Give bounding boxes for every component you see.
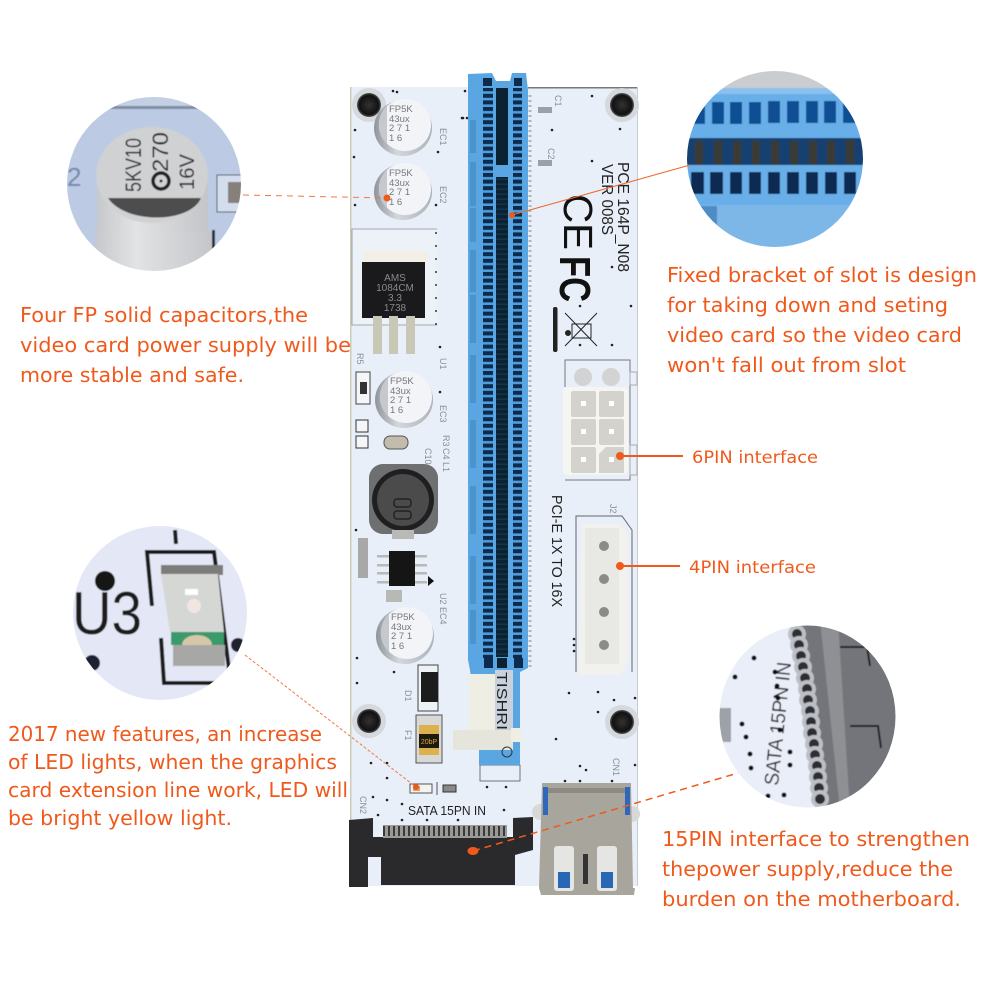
text block: capacitors: video card power supply will be bbox=[20, 333, 351, 357]
silkscreen small labels: C4 L1 bbox=[441, 448, 451, 472]
label: 6PIN: 6PIN interface bbox=[692, 448, 818, 468]
slot latch clip and TISHRI label: TISHRI bbox=[493, 672, 510, 730]
silkscreen small labels: R5 bbox=[355, 353, 365, 365]
text block: 15PIN: 15PIN interface to strengthen bbox=[662, 827, 970, 851]
callout circle: capacitor close-up: 5KV10 bbox=[121, 138, 146, 192]
silkscreen small labels: D1 bbox=[403, 690, 413, 702]
leader line: 6pin bbox=[616, 452, 683, 460]
silkscreen small labels: EC3 bbox=[438, 405, 448, 423]
silkscreen small labels: U2 EC4 bbox=[438, 593, 448, 625]
silkscreen small labels: CN2 bbox=[358, 796, 368, 814]
text block: capacitors bbox=[20, 303, 351, 387]
small pads bbox=[356, 107, 552, 602]
board text: VER 008S bbox=[598, 164, 615, 235]
icon: crossed-out bin bbox=[565, 313, 597, 346]
callout circle: slot close-up bbox=[687, 71, 863, 247]
6pin connector bbox=[563, 360, 637, 480]
slot latch clip and TISHRI label bbox=[453, 670, 522, 757]
text block: LED lights: card extension line work, LED will bbox=[8, 778, 348, 802]
PCIe 16x slot bbox=[468, 73, 530, 781]
panel: riser board bbox=[350, 87, 639, 886]
board text bbox=[408, 162, 631, 818]
via dots bbox=[353, 90, 636, 821]
label: 4PIN: 4PIN interface bbox=[689, 558, 816, 578]
silkscreen small labels: EC1 bbox=[438, 128, 448, 146]
LED on board bbox=[410, 782, 456, 795]
text block: fixed bracket: Fixed bracket of slot is design bbox=[667, 263, 977, 287]
callout circle: capacitor close-up: 2 bbox=[67, 162, 81, 192]
capacitors bbox=[374, 99, 434, 664]
text block: fixed bracket: won't fall out from slot bbox=[667, 353, 906, 377]
silkscreen small labels: U1 bbox=[438, 358, 448, 370]
silkscreen small labels: J2 bbox=[608, 504, 618, 514]
silkscreen small labels: F1 bbox=[403, 730, 413, 741]
board text: PCI-E 1X TO 16X bbox=[548, 495, 565, 607]
inductor bbox=[369, 464, 438, 539]
callout circle: LED close-up: U3 bbox=[72, 580, 142, 647]
callout circle: SATA pins close-up: SATA 15PN IN bbox=[761, 661, 796, 787]
voltage regulator chip: 1738 bbox=[384, 303, 407, 314]
SMD chip bbox=[377, 551, 434, 586]
leader line: 4pin bbox=[616, 562, 680, 570]
voltage regulator chip: 3.3 bbox=[388, 293, 402, 304]
text block: fixed bracket bbox=[667, 263, 977, 377]
voltage regulator chip: 1084CM bbox=[376, 283, 414, 294]
text block: capacitors: Four FP solid capacitors,the bbox=[20, 303, 308, 327]
board text: PCE 164P_N08 bbox=[614, 162, 631, 272]
4pin connector bbox=[576, 516, 632, 675]
board text: FC bbox=[550, 256, 599, 302]
voltage regulator chip bbox=[352, 229, 437, 354]
text block: 15PIN bbox=[662, 827, 970, 911]
callout circle: capacitor close-up bbox=[67, 97, 241, 271]
callout circle: capacitor close-up: 270 bbox=[148, 132, 173, 172]
silkscreen small labels bbox=[355, 95, 621, 814]
text block: 15PIN: burden on the motherboard. bbox=[662, 887, 961, 911]
text block: LED lights bbox=[8, 722, 348, 830]
silkscreen small labels: C1 bbox=[553, 95, 563, 107]
board text: SATA 15PN IN bbox=[408, 803, 486, 818]
callout circle: SATA pins close-up bbox=[720, 626, 896, 808]
mounting holes bbox=[352, 88, 639, 739]
text block: LED lights: of LED lights, when the graphics bbox=[8, 750, 337, 774]
voltage regulator chip: AMS bbox=[384, 273, 406, 284]
USB 3.0 socket bbox=[532, 783, 640, 895]
silkscreen small labels: C10 bbox=[423, 448, 433, 465]
leader line: LED bbox=[245, 655, 419, 790]
dotted trace beside slot bbox=[528, 95, 532, 670]
text block: fixed bracket: video card so the video card bbox=[667, 323, 962, 347]
callout circle: capacitor close-up: 16V bbox=[176, 154, 199, 190]
text block: capacitors: more stable and safe. bbox=[20, 363, 244, 387]
leader line: capacitor bbox=[243, 194, 390, 202]
text block: LED lights: 2017 new features, an increase bbox=[8, 722, 322, 746]
silkscreen small labels: CN1 bbox=[611, 758, 621, 776]
callout circle: LED close-up bbox=[72, 525, 248, 701]
leader line: SATA bbox=[468, 773, 738, 855]
silkscreen small labels: C2 bbox=[546, 148, 556, 160]
leader line: slot bracket bbox=[509, 165, 690, 218]
text block: fixed bracket: for taking down and seting bbox=[667, 293, 948, 317]
diode and fuse: 20bP bbox=[421, 739, 437, 746]
text block: 15PIN: thepower supply,reduce the bbox=[662, 857, 953, 881]
silkscreen small labels: R3 bbox=[441, 435, 451, 447]
SATA 15pin connector bbox=[349, 817, 533, 887]
diode and fuse bbox=[416, 665, 442, 763]
silkscreen small labels: EC2 bbox=[438, 186, 448, 204]
text block: LED lights: be bright yellow light. bbox=[8, 806, 232, 830]
board text: CE bbox=[555, 194, 601, 250]
